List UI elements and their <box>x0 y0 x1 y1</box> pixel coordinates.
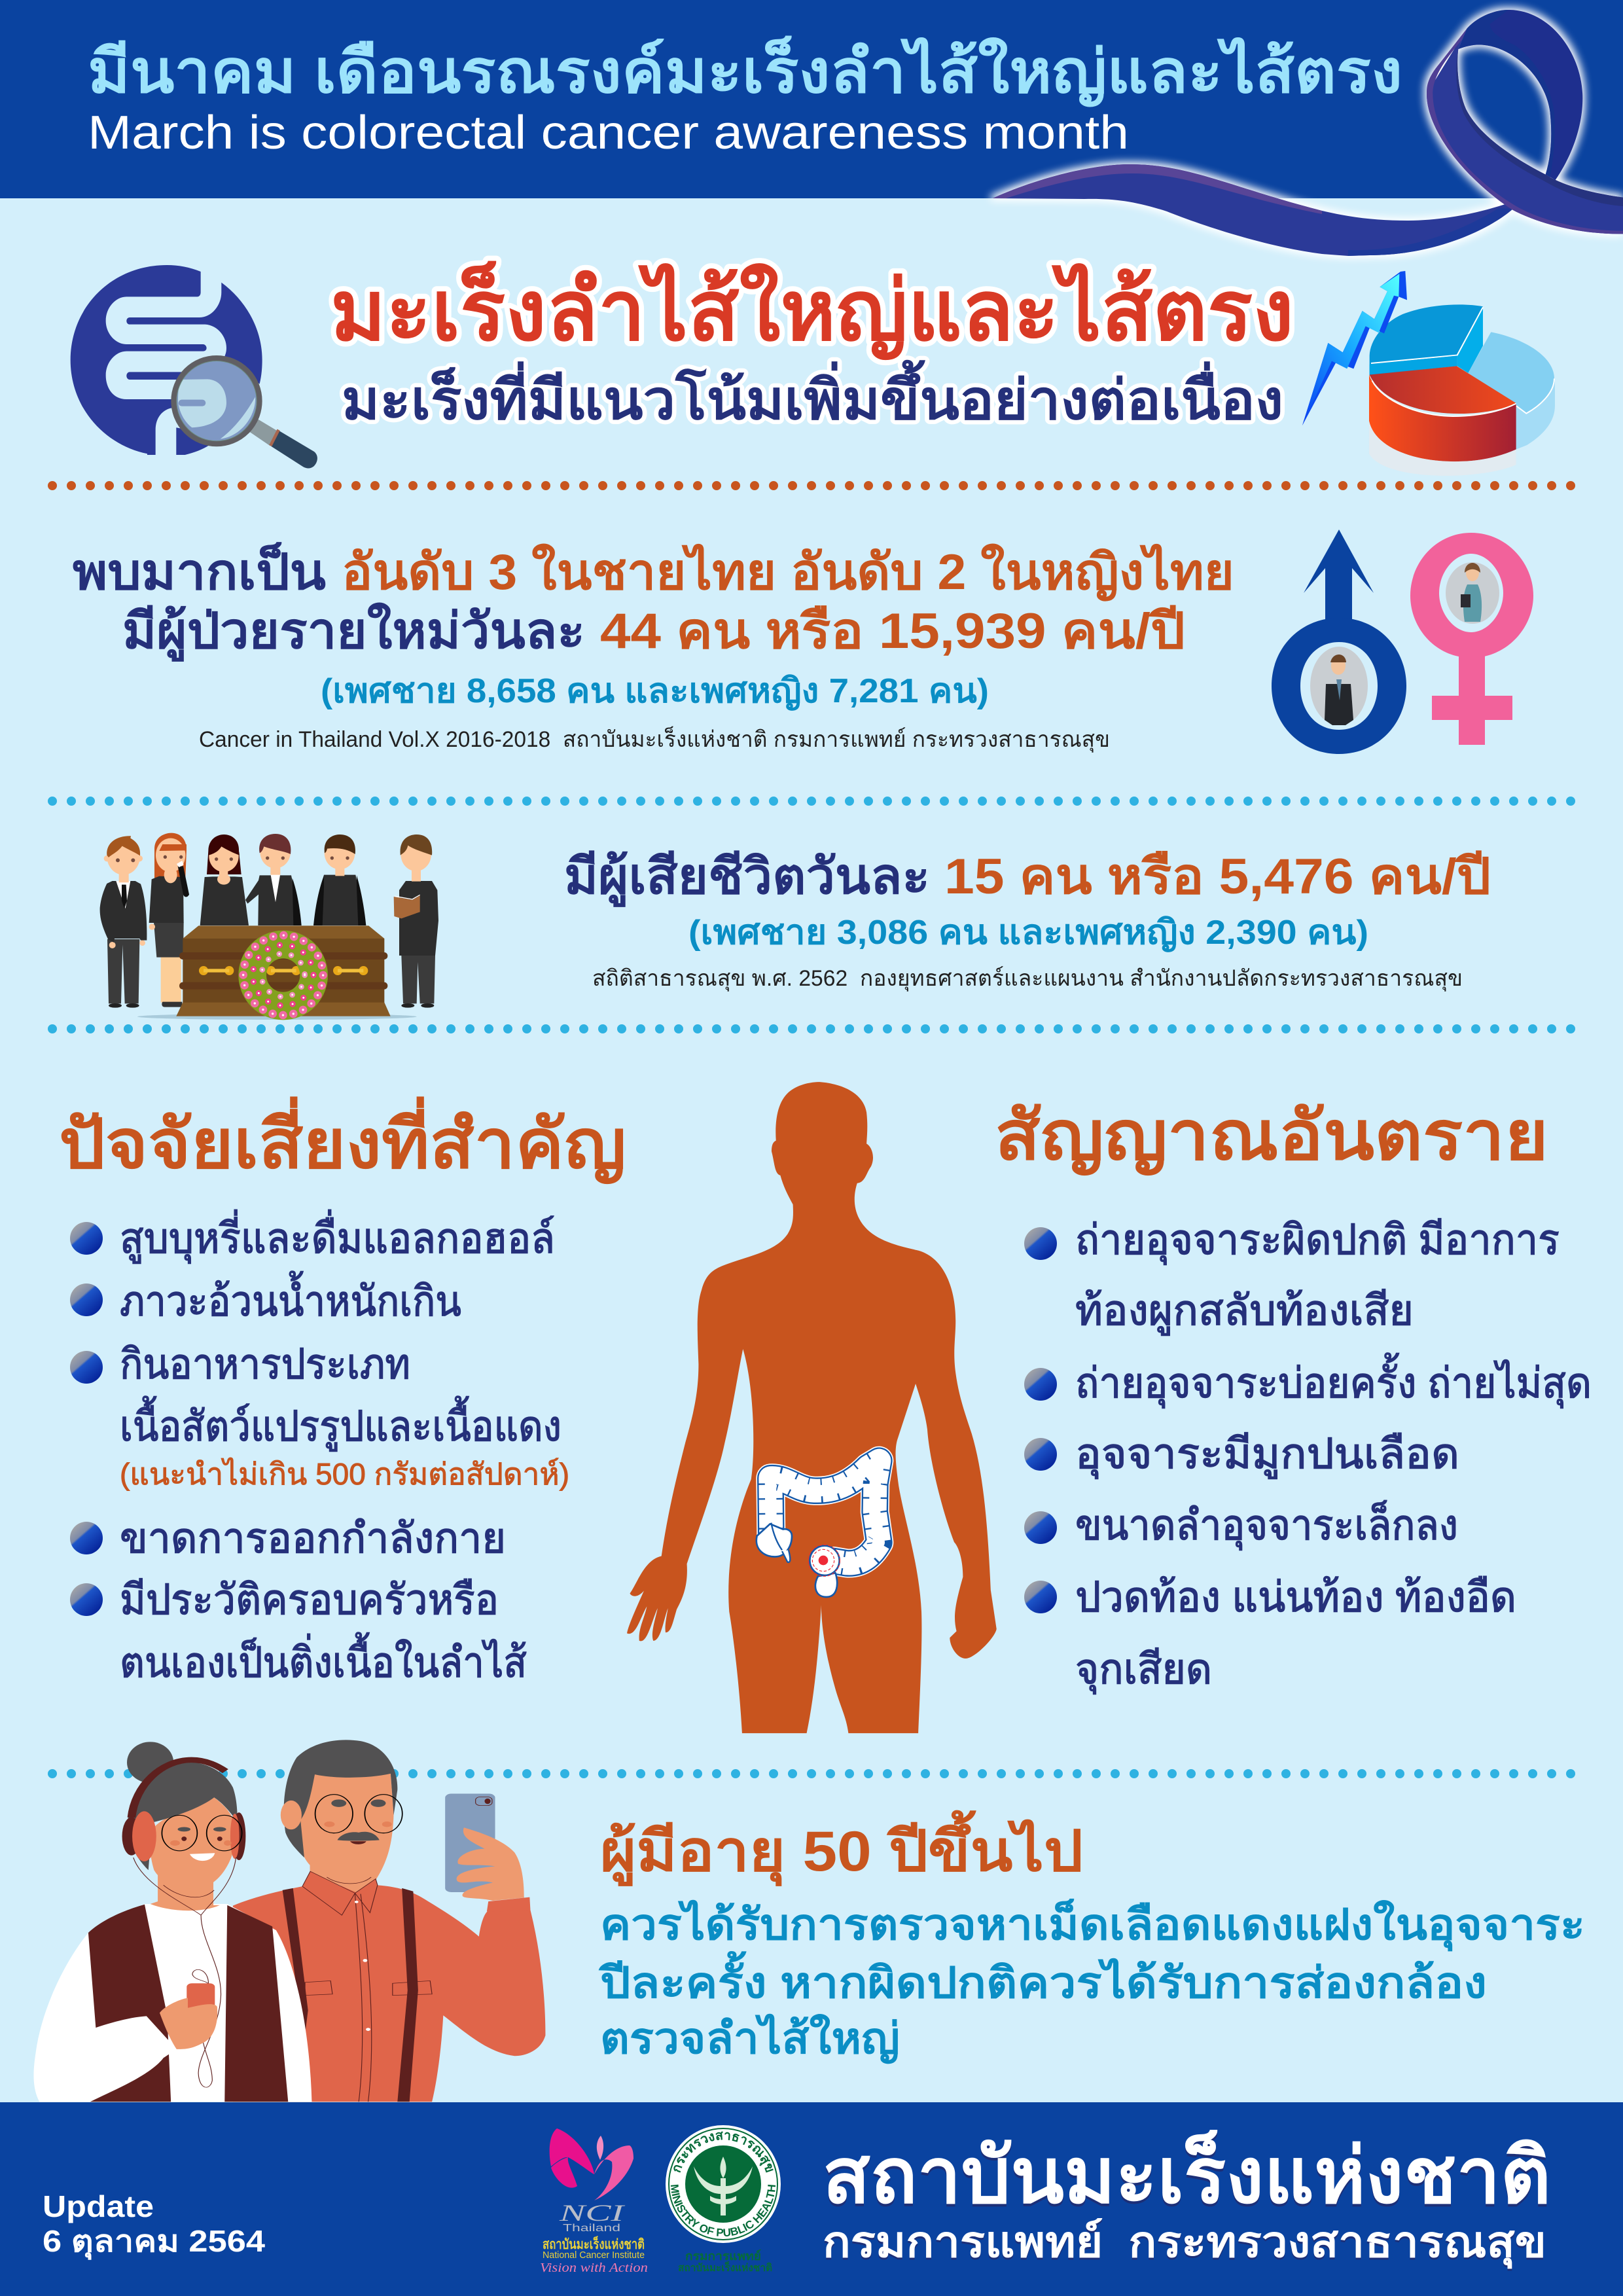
mortality navy: มีผู้เสียชีวิตวันละ <box>564 849 930 907</box>
mourner 2 <box>149 833 189 1007</box>
institute name: สถาบันมะเร็งแห่งชาติ <box>823 2129 1551 2219</box>
warning list: อุจจาระมีมูกปนเลือด <box>1075 1430 1459 1479</box>
mourner 1 <box>100 836 147 1008</box>
warning bullets <box>1024 1227 1057 1613</box>
heading line 2: มะเร็งที่มีแนวโน้มเพิ่มขึ้นอย่างต่อเนื่อง <box>342 359 1283 431</box>
panel: incidence statistics <box>73 542 1234 753</box>
logo: national cancer institute: สถาบันมะเร็งแห่งชาติ <box>543 2235 645 2252</box>
wreath <box>243 935 323 1015</box>
incidence line 1 navy: พบมากเป็น <box>73 542 326 600</box>
warning list: ขนาดลำอุจจาระเล็กลง <box>1075 1501 1458 1551</box>
risk bullets <box>70 1222 103 1616</box>
rising arrow <box>1302 271 1407 425</box>
screening text: ปีละครั้ง หากผิดปกติควรได้รับการส่องกล้อง <box>598 1950 1487 2007</box>
risk list: สูบบุหรี่และดื่มแอลกอฮอล์ <box>120 1210 555 1264</box>
header band <box>0 0 1623 256</box>
update date: 6 ตุลาคม 2564 <box>43 2224 265 2260</box>
heading line 1: มะเร็งลำไส้ใหญ่และไส้ตรง <box>330 260 1294 361</box>
mortality split by sex: (เพศชาย 3,086 คน และเพศหญิง 2,390 คน) <box>688 914 1368 952</box>
icon: mourners around coffin <box>100 833 438 1020</box>
footer band <box>0 2102 1623 2296</box>
logo: national cancer institute: Thailand <box>563 2223 620 2234</box>
woman <box>33 1742 312 2102</box>
man figure <box>1325 655 1353 725</box>
risk list: ภาวะอ้วนน้ำหนักเกิน <box>120 1271 461 1325</box>
risk list: กินอาหารประเภท <box>120 1340 410 1388</box>
screening text: ตรวจลำไส้ใหญ่ <box>600 2013 900 2064</box>
logo: national cancer institute <box>540 2128 648 2275</box>
main heading <box>330 260 1294 431</box>
mourner 5 <box>313 834 366 925</box>
icon: elderly couple taking selfie <box>33 1740 545 2102</box>
title english: March is colorectal cancer awareness month <box>88 107 1129 159</box>
screening text <box>598 1898 1585 2064</box>
warning list: ท้องผูกสลับท้องเสีย <box>1075 1287 1414 1336</box>
logo: ministry of public health <box>666 2125 781 2274</box>
icon: awareness ribbon <box>993 10 1623 256</box>
risk list: เนื้อสัตว์แปรรูปและเนื้อแดง <box>120 1396 562 1452</box>
man <box>233 1740 545 2102</box>
logo: ministry of public health: กรมการแพทย์ <box>685 2249 761 2263</box>
warning list <box>1075 1216 1592 1695</box>
magnifier handle <box>250 419 317 469</box>
risk list <box>120 1210 569 1686</box>
incidence source: Cancer in Thailand Vol.X 2016-2018 สถาบันมะเร็งแห่งชาติ กรมการแพทย์ กระทรวงสาธารณสุข <box>199 726 1110 753</box>
screening text: ควรได้รับการตรวจหาเม็ดเลือดแดงแฝงในอุจจาระ <box>600 1898 1585 1952</box>
warning list: ถ่ายอุจจาระบ่อยครั้ง ถ่ายไม่สุด <box>1075 1353 1592 1408</box>
man hand <box>457 1827 524 1901</box>
mourner 4 <box>245 834 302 925</box>
update date: Update <box>43 2189 154 2223</box>
incidence line 1 orange: อันดับ 3 ในชายไทย อันดับ 2 ในหญิงไทย <box>342 543 1234 601</box>
logo: national cancer institute: Vision with Action <box>540 2261 648 2275</box>
risk list: ตนเองเป็นติ่งเนื้อในลำไส้ <box>120 1632 527 1686</box>
divider dots orange <box>52 481 1572 490</box>
update date <box>43 2189 265 2260</box>
rectum <box>815 1573 837 1597</box>
mortality orange: 15 คน หรือ 5,476 คน/ปี <box>944 849 1491 905</box>
logo: national cancer institute: National Cancer Institute <box>543 2250 645 2261</box>
colon <box>757 1461 879 1597</box>
panel: mortality statistics <box>564 849 1491 992</box>
icon: intestine with magnifier <box>71 265 317 469</box>
coffin <box>176 925 391 1016</box>
mourner 6 with book <box>394 834 438 1008</box>
phone <box>445 1794 495 1892</box>
department and ministry: กรมการแพทย์ กระทรวงสาธารณสุข <box>823 2217 1546 2269</box>
icon: body silhouette with colon <box>627 1082 997 1733</box>
incidence line 2 navy: มีผู้ป่วยรายใหม่วันละ <box>122 602 585 662</box>
panel: risk factors <box>59 1096 626 1686</box>
warning list: ปวดท้อง แน่นท้อง ท้องอืด <box>1075 1573 1516 1621</box>
warning list: จุกเสียด <box>1075 1645 1212 1695</box>
logo: ministry of public health: MINISTRY OF PUBLIC HEALTH <box>670 2185 776 2236</box>
woman figure <box>1461 563 1482 622</box>
divider dots blue 3 <box>52 1769 1572 1778</box>
icon: female symbol <box>1410 533 1533 745</box>
incidence line 2 orange: 44 คน หรือ 15,939 คน/ปี <box>600 603 1185 659</box>
logo: national cancer institute: NCI <box>558 2200 626 2226</box>
panel: screening advice <box>598 1810 1585 2064</box>
title thai: มีนาคม เดือนรณรงค์มะเร็งลำไส้ใหญ่และไส้ตรง <box>88 35 1402 107</box>
tumour <box>808 1545 840 1576</box>
warning list: ถ่ายอุจจาระผิดปกติ มีอาการ <box>1075 1216 1560 1265</box>
caecum <box>757 1524 792 1556</box>
mortality source: สถิติสาธารณสุข พ.ศ. 2562 กองยุทธศาสตร์และแผนงาน สำนักงานปลัดกระทรวงสาธารณสุข <box>592 966 1463 992</box>
icon: 3d pie chart with rising arrow <box>1302 271 1555 476</box>
logo: ministry of public health: กระทรวงสาธารณสุข <box>673 2131 774 2173</box>
divider dots blue 2 <box>52 1024 1572 1033</box>
logo: ministry of public health: สถาบันมะเร็งแห่งชาติ <box>678 2260 772 2274</box>
screening heading: ผู้มีอายุ 50 ปีขึ้นไป <box>600 1810 1083 1886</box>
risk list: (แนะนำไม่เกิน 500 กรัมต่อสัปดาห์) <box>120 1457 569 1491</box>
risk list: ขาดการออกกำลังกาย <box>120 1515 506 1562</box>
risk list: มีประวัติครอบครัวหรือ <box>120 1576 499 1623</box>
warning heading: สัญญาณอันตราย <box>995 1098 1548 1176</box>
divider dots blue 1 <box>52 797 1572 806</box>
panel: warning signs <box>995 1098 1592 1695</box>
mourner 3 <box>200 834 249 925</box>
magnifier lens <box>173 358 260 444</box>
risk heading: ปัจจัยเสี่ยงที่สำคัญ <box>59 1096 626 1185</box>
icon: male symbol <box>1272 529 1406 754</box>
incidence split by sex: (เพศชาย 8,658 คน และเพศหญิง 7,281 คน) <box>321 672 989 711</box>
